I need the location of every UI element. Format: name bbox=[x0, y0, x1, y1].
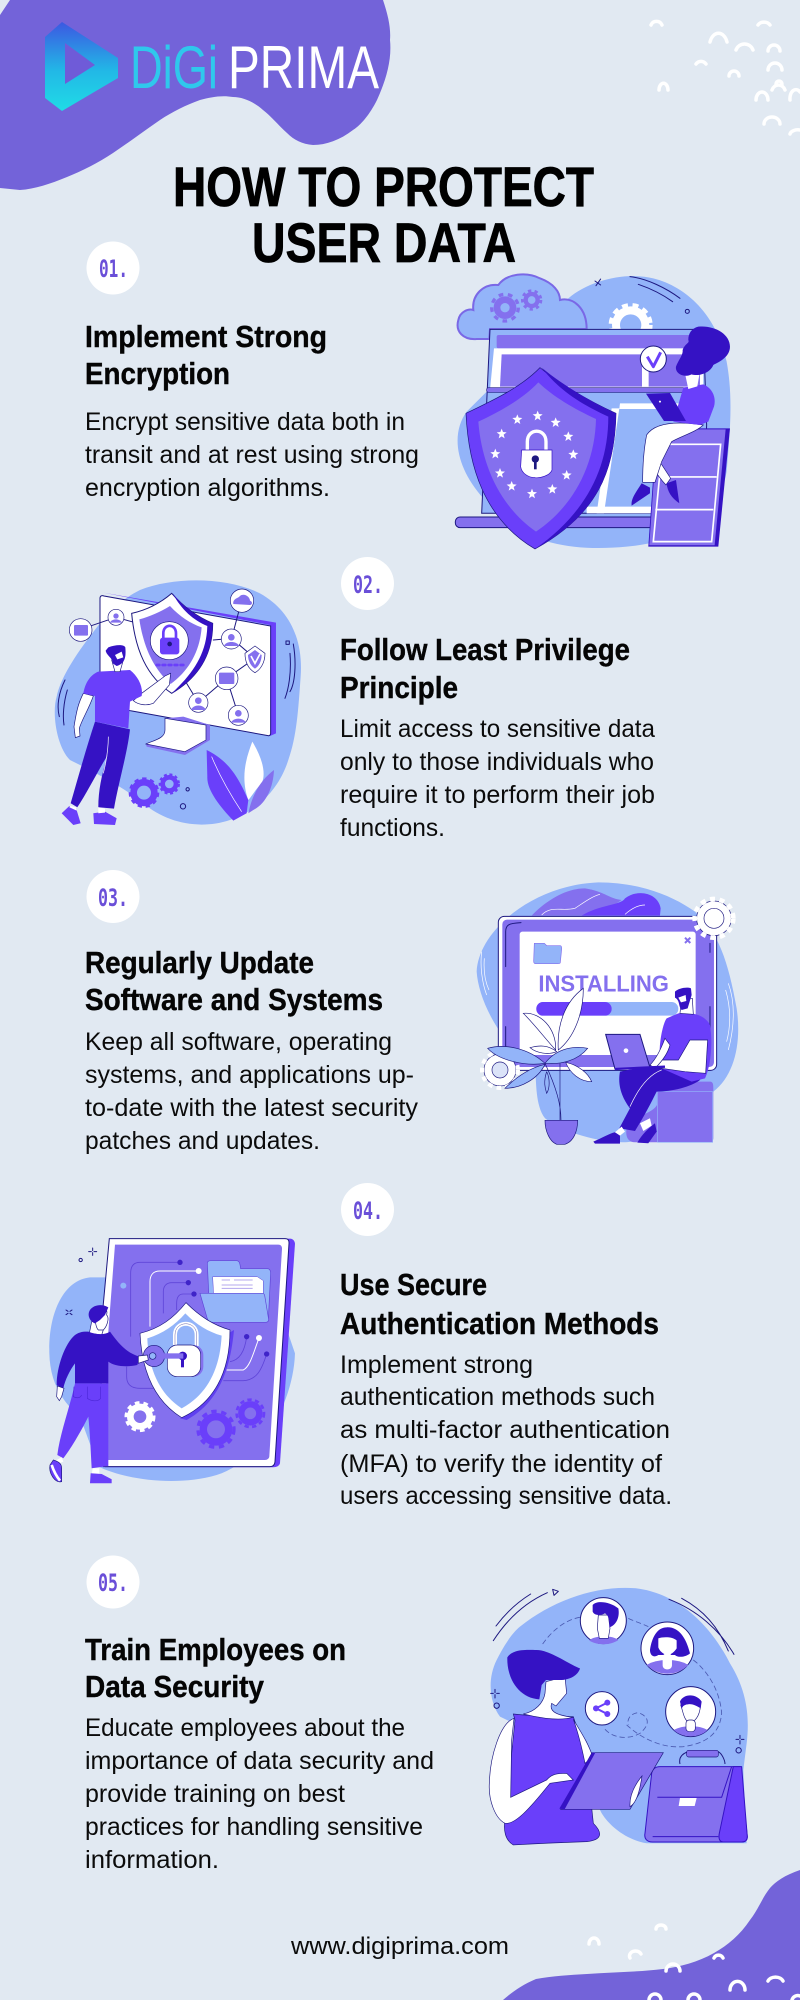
heading: step 2: Follow Least Privilege bbox=[340, 632, 630, 667]
heading: step 1: Implement Strong bbox=[85, 319, 327, 354]
shield bbox=[132, 593, 213, 693]
text: step 1: Encrypt sensitive data both in bbox=[85, 408, 405, 436]
monitor window bbox=[498, 916, 717, 1070]
text: step 4: authentication methods such bbox=[340, 1383, 655, 1411]
number badge 03: 03. bbox=[98, 884, 128, 912]
heading: step 1: Encryption bbox=[85, 356, 230, 391]
number badge 03 bbox=[86, 870, 140, 923]
network nodes bbox=[69, 589, 265, 725]
illustration: shield, browser and woman bbox=[455, 274, 730, 549]
heading: step 3: Regularly Update bbox=[85, 945, 314, 980]
number badge 04: 04. bbox=[353, 1197, 383, 1225]
share icon bbox=[585, 1692, 619, 1725]
illustration: installing screen and man bbox=[477, 882, 738, 1144]
text: step 1 bbox=[85, 408, 419, 502]
text: step 5: importance of data security and bbox=[85, 1747, 434, 1775]
text: step 2: require it to perform their job bbox=[340, 781, 655, 809]
panel: step 2 bbox=[340, 557, 655, 842]
text: step 5: Educate employees about the bbox=[85, 1714, 405, 1742]
heading: step 2: Principle bbox=[340, 670, 458, 705]
number badge 04 bbox=[341, 1183, 394, 1236]
text: step 1: transit and at rest using strong bbox=[85, 441, 419, 469]
gears bbox=[482, 899, 733, 1088]
number badge 01 bbox=[86, 242, 140, 294]
text: step 2: functions. bbox=[340, 814, 445, 842]
heading: step 1 bbox=[85, 319, 327, 391]
text: step 4 bbox=[340, 1351, 672, 1510]
number badge 02: 02. bbox=[353, 571, 383, 599]
heading: step 2 bbox=[340, 632, 630, 705]
text: step 3: Keep all software, operating bbox=[85, 1028, 392, 1056]
text: step 4: users accessing sensitive data. bbox=[340, 1482, 672, 1510]
briefcase bbox=[645, 1750, 747, 1842]
text: step 5 bbox=[85, 1714, 434, 1874]
profile 3 bbox=[666, 1687, 716, 1737]
plant bbox=[488, 988, 592, 1144]
heading: step 4 bbox=[340, 1267, 659, 1341]
phone seat bbox=[648, 428, 730, 547]
heading: step 5 bbox=[85, 1632, 346, 1704]
text: step 1: encryption algorithms. bbox=[85, 474, 330, 502]
panel: step 5 bbox=[85, 1556, 434, 1874]
logo mark bbox=[45, 22, 118, 111]
text: step 3: to-date with the latest security bbox=[85, 1094, 418, 1122]
folder bbox=[200, 1261, 271, 1322]
title bbox=[173, 155, 594, 274]
title: HOW TO PROTECT bbox=[173, 155, 594, 218]
logo wordmark: DiGi bbox=[130, 34, 218, 101]
man bbox=[62, 645, 171, 825]
heading: step 4: Use Secure bbox=[340, 1267, 487, 1302]
footer website: www.digiprima.com bbox=[290, 1933, 509, 1960]
number badge 01: 01. bbox=[99, 255, 128, 283]
profile 2 bbox=[641, 1622, 694, 1675]
heading: step 3: Software and Systems bbox=[85, 982, 383, 1017]
woman bbox=[632, 326, 730, 506]
heading: step 4: Authentication Methods bbox=[340, 1306, 659, 1341]
number badge 05: 05. bbox=[98, 1569, 128, 1597]
text: step 2: only to those individuals who bbox=[340, 748, 654, 776]
man with laptop bbox=[593, 988, 713, 1144]
heading: step 5: Data Security bbox=[85, 1669, 265, 1704]
text: step 4: Implement strong bbox=[340, 1351, 533, 1379]
text: step 4: as multi-factor authentication bbox=[340, 1416, 670, 1444]
text: step 3: systems, and applications up- bbox=[85, 1061, 414, 1089]
leaves bbox=[207, 742, 274, 821]
decorative arcs: top right bbox=[651, 21, 800, 134]
heading: step 5: Train Employees on bbox=[85, 1632, 346, 1667]
panel: step 3 bbox=[85, 870, 418, 1155]
text: step 2 bbox=[340, 715, 655, 842]
illustration: woman with tablet, profiles and briefcase bbox=[489, 1588, 748, 1845]
profile 1 bbox=[580, 1598, 626, 1644]
illustration: tablet, padlock shield and man with key bbox=[49, 1239, 295, 1483]
text: step 4: (MFA) to verify the identity of bbox=[340, 1450, 662, 1478]
gears bbox=[130, 774, 189, 809]
woman bbox=[489, 1650, 663, 1845]
text: step 5: practices for handling sensitive bbox=[85, 1813, 423, 1841]
key bbox=[143, 1345, 183, 1367]
decorative blob: bottom right bbox=[503, 1870, 800, 2000]
man bbox=[50, 1305, 148, 1483]
text: step 5: provide training on best bbox=[85, 1780, 345, 1808]
text: step 5: information. bbox=[85, 1846, 219, 1874]
number badge 02 bbox=[341, 557, 394, 610]
logo bbox=[45, 22, 379, 111]
title: USER DATA bbox=[252, 211, 516, 274]
logo wordmark: PRIMA bbox=[228, 34, 379, 101]
number badge 05 bbox=[86, 1556, 140, 1608]
heading: step 3 bbox=[85, 945, 383, 1017]
gears bbox=[126, 1400, 264, 1447]
shield bbox=[466, 368, 616, 549]
text: step 3 bbox=[85, 1028, 418, 1155]
monitor window: INSTALLING bbox=[538, 971, 669, 997]
decorative blob: top left bbox=[0, 0, 390, 190]
panel: step 1 bbox=[85, 242, 419, 502]
panel: step 4 bbox=[340, 1183, 672, 1510]
decorative arcs: bottom right bbox=[589, 1925, 800, 2000]
text: step 3: patches and updates. bbox=[85, 1127, 320, 1155]
text: step 2: Limit access to sensitive data bbox=[340, 715, 655, 743]
shield and padlock bbox=[140, 1303, 234, 1420]
illustration: monitor network and man bbox=[55, 580, 301, 825]
